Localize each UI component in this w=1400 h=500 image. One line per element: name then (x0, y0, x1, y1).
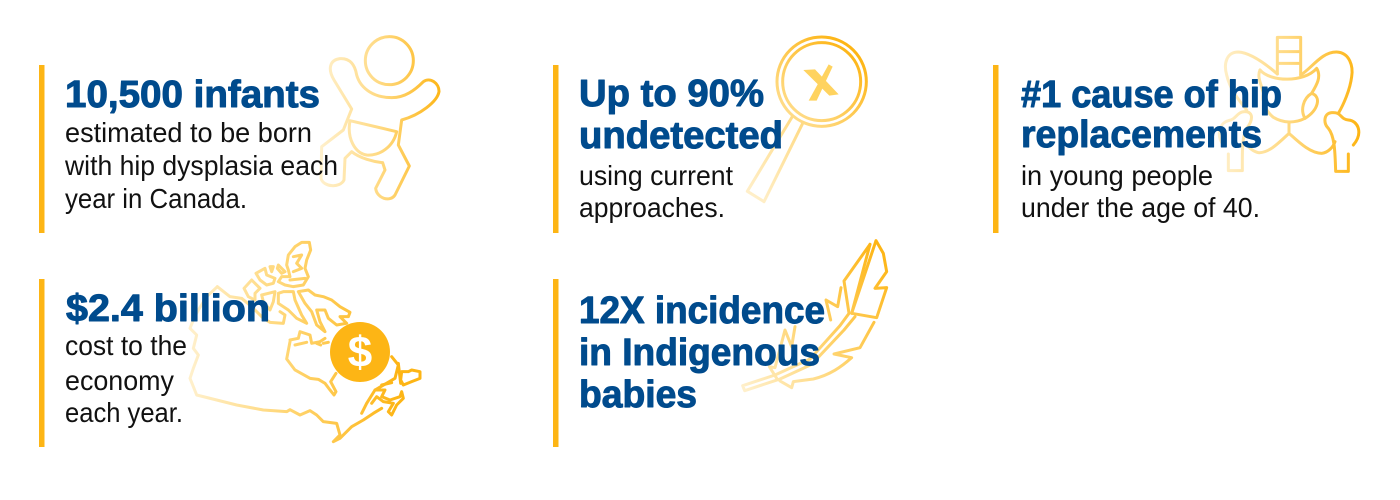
icon: magnifying glass (747, 37, 866, 202)
accent bar (39, 65, 44, 233)
body text (64, 117, 338, 214)
body text: economy (65, 365, 174, 396)
body text (579, 160, 733, 223)
accent bar (39, 279, 44, 447)
panel: 10,500 infants (39, 37, 439, 233)
panel: up to 90% undetected (553, 37, 866, 233)
body text: cost to the (65, 330, 187, 361)
icon: dollar coin (330, 322, 390, 382)
icon: baby (321, 37, 439, 199)
heading: #1 cause of hip (1021, 74, 1282, 116)
body text: under the age of 40. (1021, 192, 1260, 223)
heading (579, 290, 825, 416)
body text: estimated to be born (65, 117, 312, 148)
body text: approaches. (579, 192, 725, 223)
body text: in young people (1021, 160, 1213, 191)
icon: dollar coin: $ (348, 328, 372, 377)
body text (65, 330, 187, 428)
heading: replacements (1021, 114, 1262, 156)
panel: #1 cause of hip replacements (993, 37, 1359, 233)
heading: 12X incidence (579, 290, 825, 332)
icon: pelvis (1219, 37, 1359, 171)
heading: babies (579, 374, 697, 416)
heading (579, 73, 783, 157)
heading: 10,500 infants (65, 74, 320, 116)
accent bar (553, 65, 558, 233)
icon: feather (743, 241, 887, 391)
panel: 12X incidence (553, 241, 887, 447)
body text: each year. (65, 397, 183, 428)
heading: $2.4 billion (66, 288, 270, 330)
body text: using current (579, 160, 733, 191)
body text: with hip dysplasia each (64, 150, 338, 181)
accent bar (993, 65, 998, 233)
body text (1021, 160, 1260, 223)
heading: Up to 90% (579, 73, 764, 115)
heading: in Indigenous (579, 332, 820, 374)
panel: $2.4 billion (39, 242, 420, 447)
accent bar (553, 279, 558, 447)
heading: undetected (579, 115, 783, 157)
body text: year in Canada. (65, 183, 247, 214)
icon: map of Canada (190, 242, 420, 442)
heading (1021, 74, 1282, 156)
